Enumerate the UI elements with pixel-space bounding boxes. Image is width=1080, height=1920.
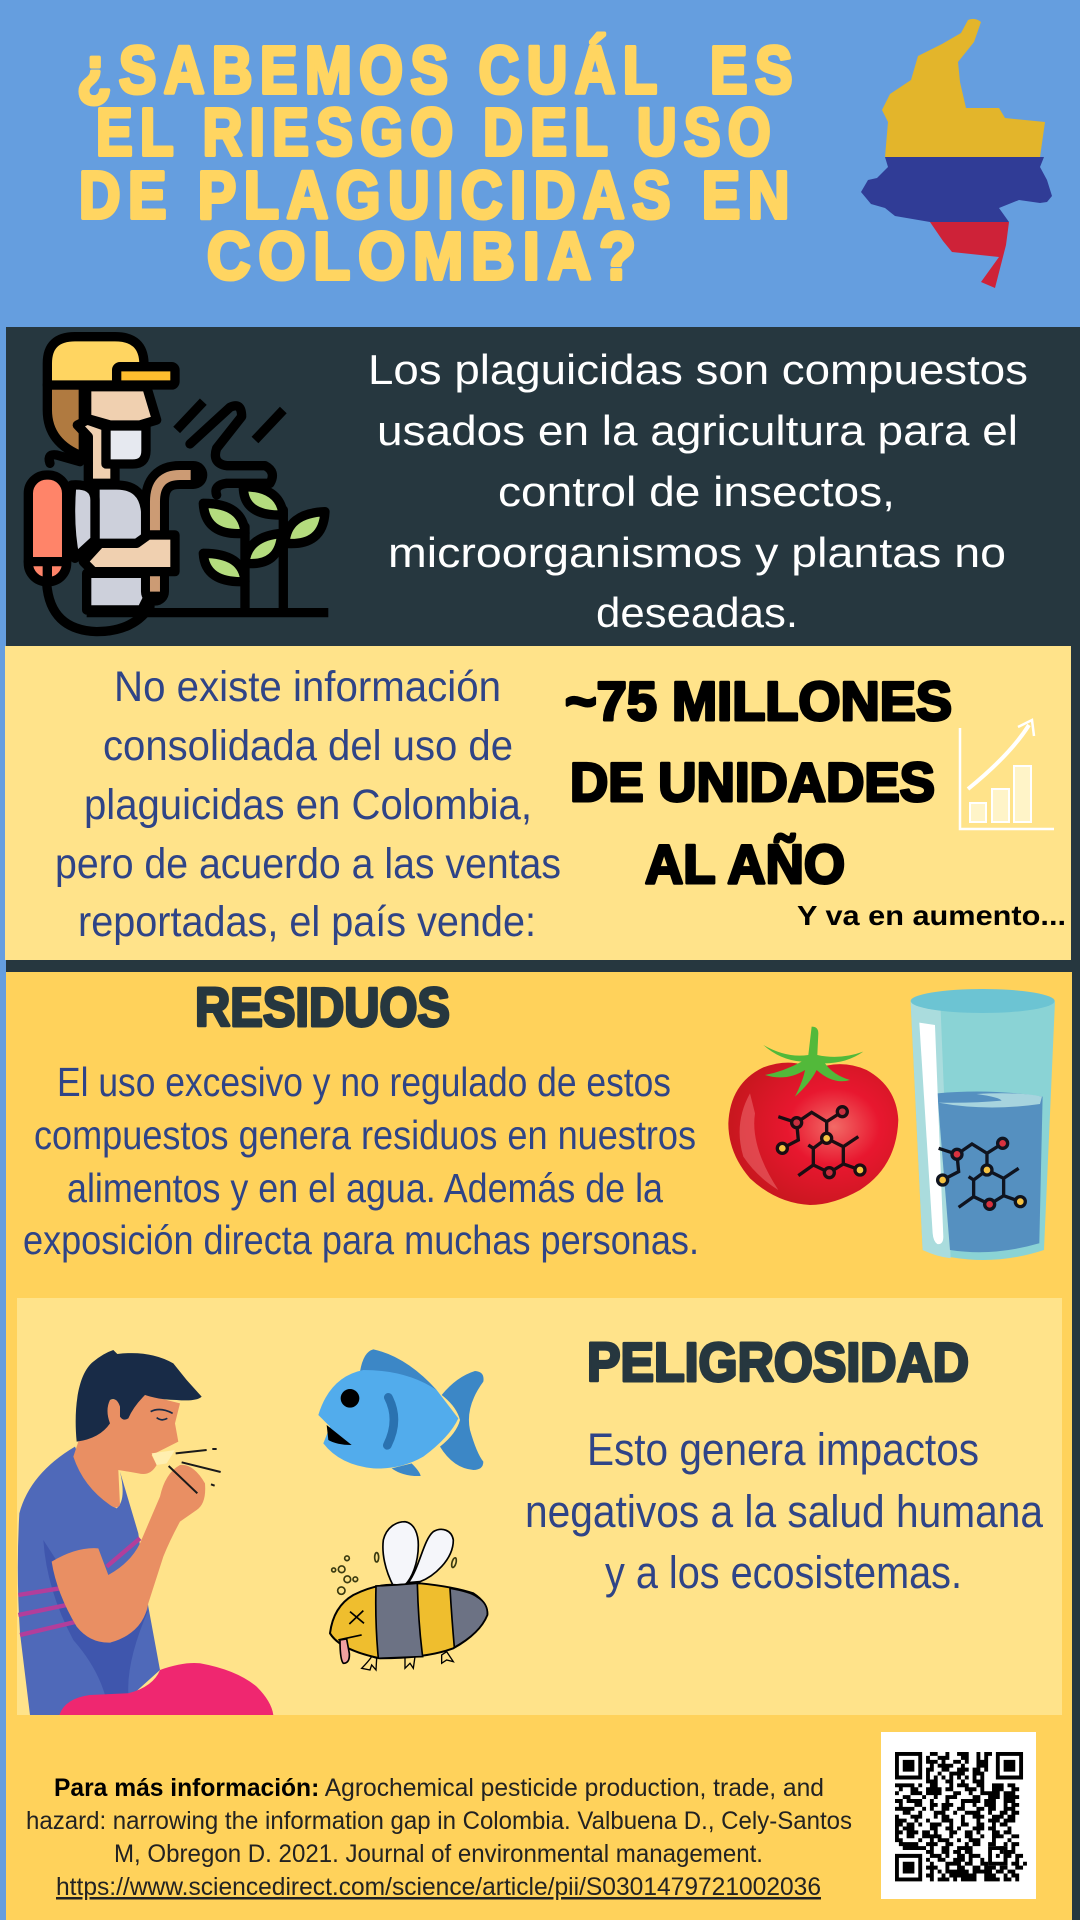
text: residues description: exposición directa para muchas personas.	[23, 1217, 699, 1263]
text: residues description: compuestos genera residuos en nuestros	[34, 1112, 696, 1158]
text: residues description: El uso excesivo y no regulado de estos	[57, 1059, 671, 1105]
text: pesticide definition	[368, 346, 1028, 636]
heading: peligrosidad: PELIGROSIDAD	[587, 1331, 969, 1393]
icon: QR code	[881, 1732, 1036, 1899]
text: sales intro: pero de acuerdo a las ventas	[55, 840, 561, 888]
text: pesticide definition: control de insectos,	[498, 468, 895, 515]
icon: glass of water with molecule	[911, 989, 1055, 1260]
title: COLOMBIA?	[207, 219, 644, 294]
text: reference	[26, 1774, 852, 1901]
text: pesticide definition: Los plaguicidas son compuestos	[368, 346, 1028, 393]
icon: tomato with molecule	[728, 1027, 898, 1205]
title: ¿SABEMOS CUÁL ES	[77, 33, 800, 108]
text: pesticide definition: usados en la agricultura para el	[377, 407, 1018, 454]
text: reference: Para más información: Agrochemical pesticide production, trade, and	[54, 1774, 824, 1802]
text: pesticide definition: microorganismos y plantas no	[388, 529, 1006, 576]
statistic: 75 million units	[565, 670, 952, 895]
text: sales intro	[55, 663, 561, 946]
text: reference: hazard: narrowing the information gap in Colombia. Valbuena D., Cely-Santos	[26, 1807, 852, 1835]
heading: residuos: RESIDUOS	[195, 976, 450, 1038]
icon: dead bee	[330, 1522, 487, 1670]
panel: residues	[6, 972, 1072, 1920]
statistic: 75 million units: DE UNIDADES	[570, 751, 935, 813]
text: sales intro: reportadas, el país vende:	[78, 898, 536, 946]
panel: danger	[17, 1298, 1062, 1715]
statistic: 75 million units: ~75 MILLONES	[565, 670, 952, 732]
text: danger description: y a los ecosistemas.	[605, 1547, 962, 1598]
title: EL RIESGO DEL USO	[96, 95, 778, 170]
text: and rising: Y va en aumento...	[797, 900, 1066, 931]
text: pesticide definition: deseadas.	[596, 589, 798, 636]
icon: rising bar chart	[960, 720, 1054, 829]
icon: farmer spraying plants	[28, 337, 328, 632]
text: reference: https://www.sciencedirect.com/science/article/pii/S0301479721002036	[56, 1873, 821, 1901]
text: sales intro: No existe información	[114, 663, 501, 711]
panel: title banner	[0, 0, 1080, 327]
title: DE PLAGUICIDAS EN	[79, 158, 797, 233]
icon: fish	[318, 1349, 484, 1476]
text: sales intro: consolidada del uso de	[103, 722, 513, 770]
text: danger description	[525, 1424, 1044, 1598]
icon: coughing man	[18, 1350, 273, 1715]
text: danger description: Esto genera impactos	[587, 1424, 979, 1475]
text: reference: M, Obregon D. 2021. Journal of environmental management.	[114, 1840, 763, 1868]
title	[77, 33, 800, 294]
text: residues description	[23, 1059, 699, 1263]
icon: Colombia flag map	[861, 19, 1052, 288]
statistic: 75 million units: AL AÑO	[645, 833, 845, 895]
panel: sales	[5, 646, 1071, 960]
text: residues description: alimentos y en el agua. Además de la	[67, 1165, 663, 1211]
text: sales intro: plaguicidas en Colombia,	[84, 781, 532, 829]
